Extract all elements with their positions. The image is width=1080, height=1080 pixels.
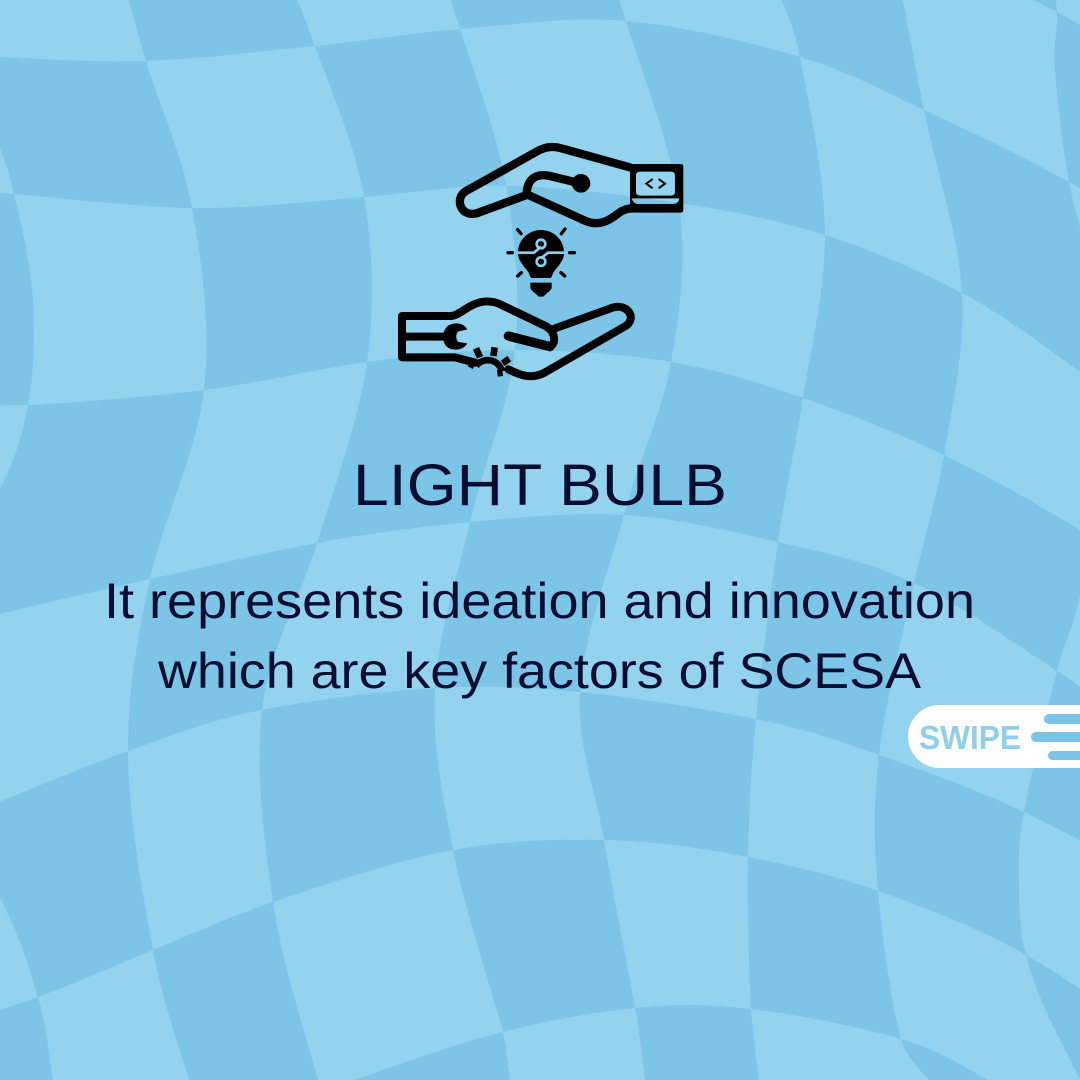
body text [104,573,975,699]
icon: upper hand with laptop cuff [460,147,683,223]
icon: hands sharing a light bulb [402,147,683,376]
swipe arrow lines [1031,714,1080,760]
swipe label: SWIPE [919,719,1021,756]
heading: LIGHT BULB [353,453,727,518]
swipe button [908,705,1080,768]
icon: lower hand with wrench and gear [402,301,631,376]
body text: It represents ideation and innovation [104,573,975,629]
icon: light bulb with circuit [508,229,574,297]
body text: which are key factors of SCESA [157,643,922,699]
